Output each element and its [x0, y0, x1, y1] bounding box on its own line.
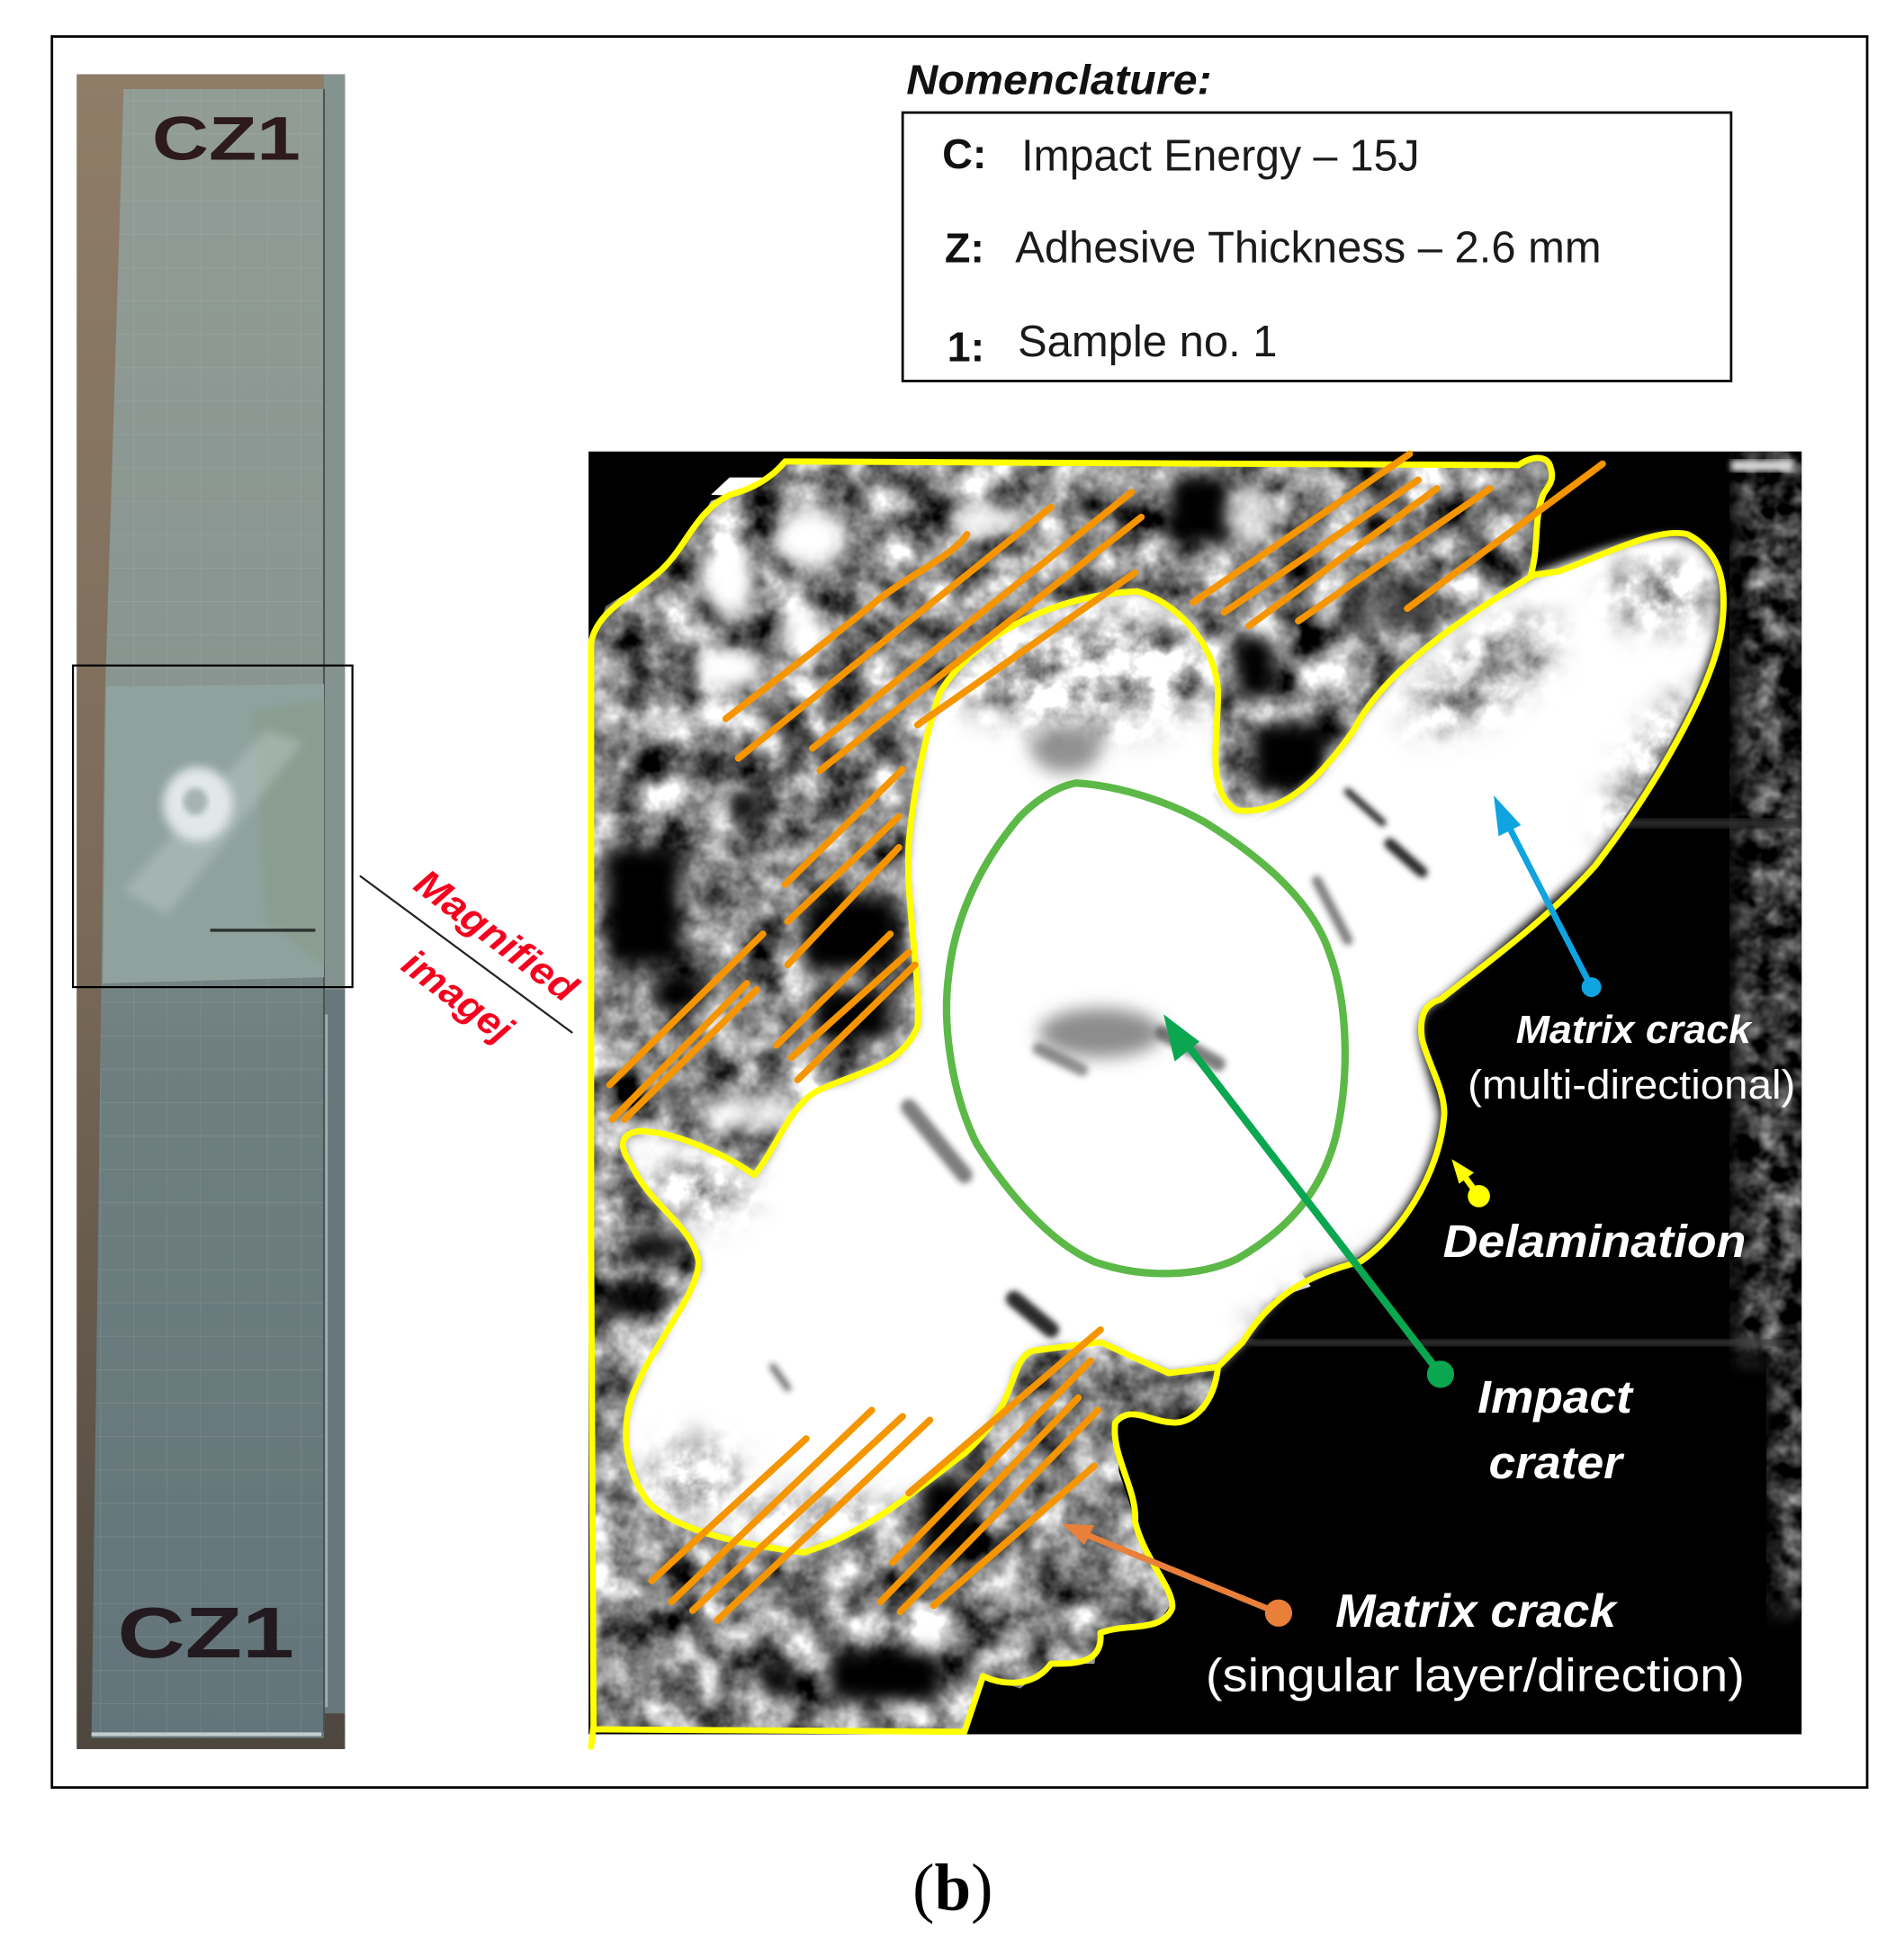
ultrasonic damage image — [581, 445, 1818, 1746]
label: impact crater: crater — [1489, 1437, 1625, 1488]
bright patches — [695, 482, 1271, 1131]
sample label top: CZ1 — [152, 103, 301, 173]
label: matrix crack singular: Matrix crack — [1335, 1585, 1619, 1638]
outline: delamination boundary — [591, 458, 1724, 1746]
dark streaks in damaged area — [773, 792, 1422, 1388]
label: matrix crack singular: (singular layer/direction) — [1206, 1649, 1745, 1701]
impact crater outline — [947, 783, 1345, 1273]
nomenclature box — [903, 112, 1731, 381]
label: matrix crack multi-directional: (multi-directional) — [1468, 1062, 1795, 1108]
mottled partially damaged area — [594, 461, 1549, 1729]
label: imagej: imagej — [394, 941, 522, 1053]
label: Magnified: Magnified — [407, 861, 586, 1011]
impact mark on patch — [123, 730, 303, 915]
dark unbonded patches — [606, 476, 1434, 1701]
nomenclature heading: Nomenclature: — [906, 56, 1212, 103]
arrow: matrix crack multi-directional — [1494, 795, 1602, 997]
label: impact crater: Impact — [1477, 1371, 1634, 1423]
grey shading inside damaged area — [1031, 631, 1548, 1057]
nomenclature box: Impact Energy – 15J — [1021, 131, 1420, 181]
nomenclature box: C: — [942, 130, 986, 177]
arrow: delamination — [1451, 1159, 1490, 1207]
nomenclature box: Z: — [945, 224, 984, 271]
magnification leader line — [360, 875, 572, 1033]
magnified region box — [73, 666, 353, 987]
label: matrix crack multi-directional: Matrix crack — [1516, 1008, 1753, 1052]
arrow: matrix crack singular — [1062, 1524, 1292, 1627]
label: matrix crack singular — [1206, 1585, 1745, 1701]
nomenclature box: Sample no. 1 — [1018, 317, 1278, 366]
white fully delaminated area — [625, 537, 1719, 1552]
specimen photograph — [76, 74, 345, 1749]
faint grid in undamaged region — [711, 452, 1814, 1608]
label: impact crater — [1477, 1371, 1634, 1488]
orange hatching: matrix cracks — [609, 454, 1603, 1620]
nomenclature box: Adhesive Thickness – 2.6 mm — [1015, 222, 1602, 272]
sample label bottom: CZ1 — [118, 1593, 294, 1673]
label: matrix crack multi-directional — [1468, 1008, 1795, 1108]
grey mottled fringe of damaged area — [632, 537, 1719, 1548]
label: delamination: Delamination — [1443, 1216, 1746, 1267]
panel label: (b) — [912, 1852, 992, 1926]
bonded patch — [103, 684, 324, 983]
nomenclature box: 1: — [948, 323, 984, 370]
arrow: impact crater — [1163, 1014, 1454, 1388]
